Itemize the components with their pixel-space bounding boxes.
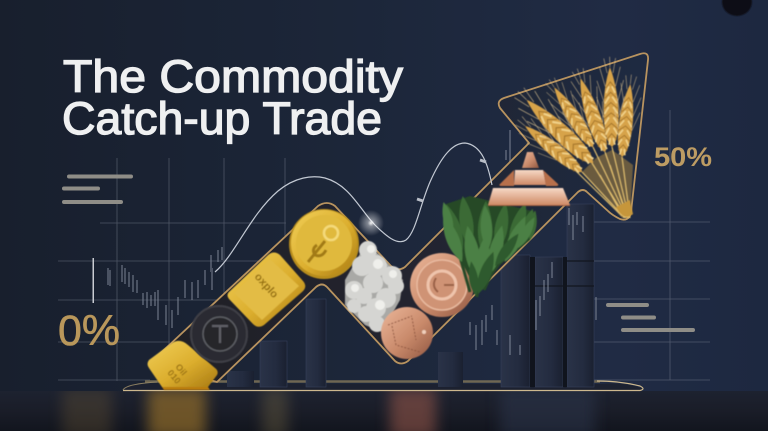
icon: copper coin: [410, 253, 474, 317]
dark blob at top edge: [722, 0, 752, 16]
trend curve: [215, 143, 492, 272]
title: The Commodity: [63, 51, 404, 102]
title: Catch-up Trade: [62, 93, 382, 144]
title: [62, 51, 404, 144]
scale tick: [92, 258, 94, 303]
icon: small gold bar: 010: [165, 368, 183, 386]
zigzag arrow frame: [150, 53, 648, 382]
label: 0%: 0%: [58, 307, 120, 355]
chart grid: [58, 110, 710, 381]
bar overlay candles: [510, 208, 583, 355]
icon: copper ball: [381, 307, 433, 359]
legend lines: lower right: [606, 303, 695, 332]
icon: copper pyramid: [488, 152, 570, 206]
icon: black coin: [190, 305, 248, 363]
icon: wheat: [507, 56, 644, 218]
glowing point: [358, 210, 384, 236]
label: 50%: 50%: [654, 142, 712, 172]
icon: large gold bar: oxplo: [252, 271, 281, 301]
base plate: [123, 381, 643, 391]
icon: gold coin: [289, 209, 359, 279]
icon: large gold bar: [228, 252, 305, 327]
candlestick chart: faint price series: [108, 130, 596, 350]
icon: green plant: [437, 195, 539, 297]
floor: [0, 388, 768, 431]
icon: small gold bar: Oil: [173, 362, 189, 377]
icon: small gold bar: [148, 341, 218, 390]
bar chart: [227, 204, 594, 387]
legend lines: upper left: [62, 174, 133, 204]
icon: cotton: [345, 241, 404, 332]
